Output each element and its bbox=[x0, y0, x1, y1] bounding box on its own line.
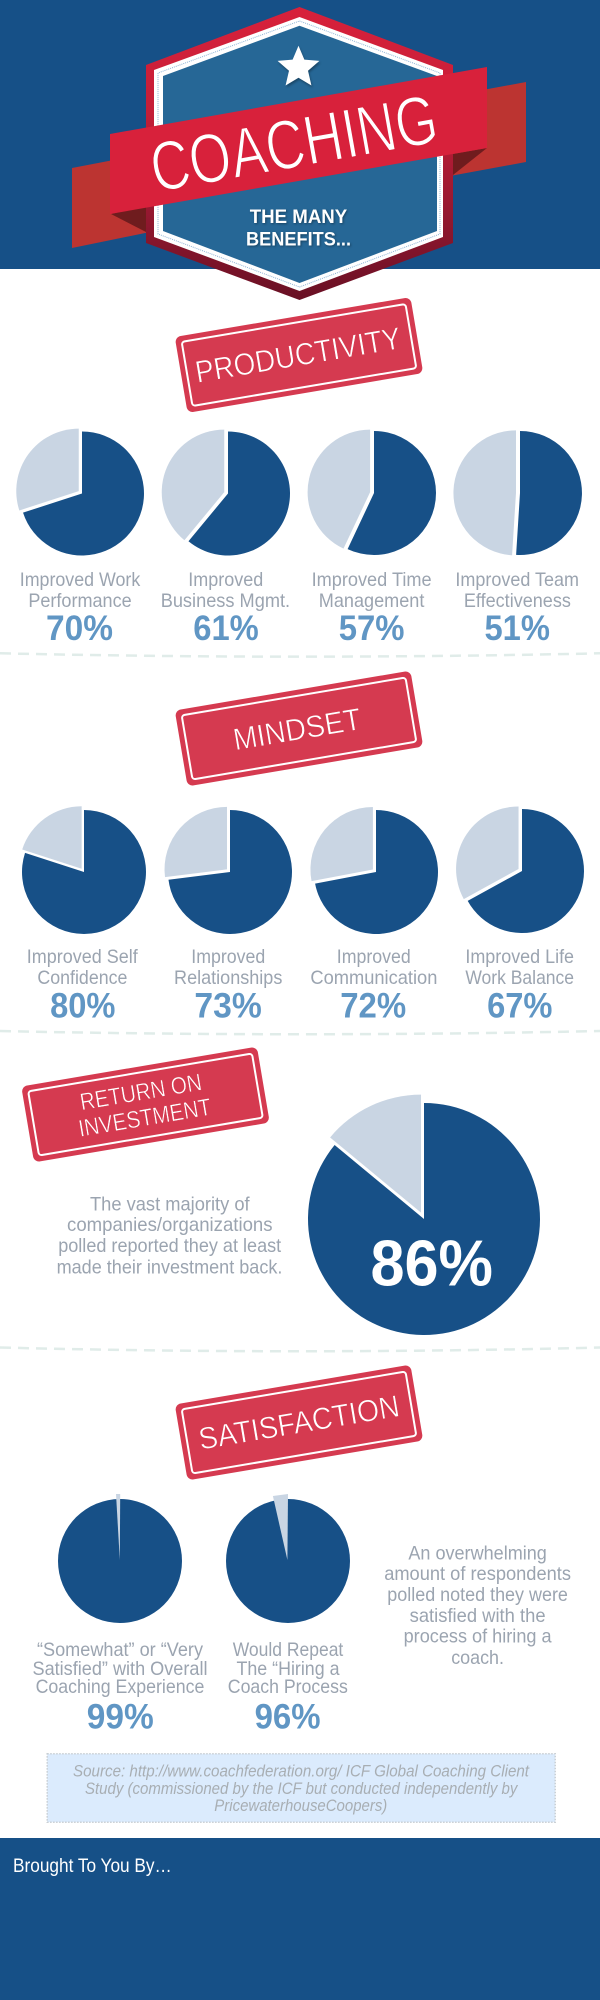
value: 73% bbox=[194, 986, 262, 1025]
text block: roi description: companies/organizations bbox=[67, 1214, 273, 1236]
text block: satisfaction description: satisfied with the bbox=[410, 1605, 546, 1627]
stat: improved work performance 70% bbox=[16, 429, 144, 648]
subtitle bbox=[246, 207, 351, 251]
text block: satisfaction description: coach. bbox=[451, 1647, 504, 1669]
label bbox=[228, 1639, 348, 1698]
label bbox=[455, 569, 579, 612]
heading stamp: productivity bbox=[175, 297, 423, 413]
value: 86% bbox=[370, 1227, 493, 1300]
text block: roi description: The vast majority of bbox=[90, 1194, 250, 1216]
value: 61% bbox=[193, 609, 259, 648]
ribbon back left bbox=[72, 153, 150, 248]
stat: satisfied with overall coaching experience 99% bbox=[32, 1494, 208, 1736]
ribbon back right bbox=[450, 82, 526, 176]
text block: satisfaction description: amount of respondents bbox=[384, 1563, 571, 1585]
heading stamp: return on investment: INVESTMENT bbox=[76, 1094, 213, 1143]
heading stamp: return on investment: RETURN ON bbox=[78, 1069, 204, 1116]
pie chart 73% bbox=[165, 807, 292, 934]
label: Communication bbox=[310, 967, 437, 989]
label: Coaching Experience bbox=[36, 1676, 204, 1698]
label: Improved Team bbox=[455, 569, 579, 591]
text block: satisfaction description: polled noted they were bbox=[387, 1584, 568, 1606]
stat: improved team effectiveness 51% bbox=[453, 430, 582, 648]
pie chart: roi 86% bbox=[308, 1095, 540, 1335]
ribbon fold left bbox=[111, 206, 146, 232]
header badge bbox=[72, 7, 526, 300]
label: Improved Time bbox=[312, 569, 432, 591]
stat: would repeat hiring a coach process 96% bbox=[226, 1494, 350, 1736]
label bbox=[310, 946, 437, 989]
value: 99% bbox=[87, 1697, 154, 1736]
pie chart 57% bbox=[308, 430, 436, 555]
label bbox=[20, 569, 140, 612]
pie chart 80% bbox=[22, 806, 146, 934]
source box: Study (commissioned by the ICF but conducted independently by bbox=[85, 1780, 519, 1798]
source box: Source: http://www.coachfederation.org/ ICF Global Coaching Client bbox=[73, 1763, 530, 1781]
pie chart 99% bbox=[58, 1494, 182, 1623]
pie chart 51% bbox=[453, 430, 582, 555]
pie chart 96% bbox=[226, 1494, 350, 1623]
icon: star bbox=[278, 46, 319, 86]
value: 57% bbox=[339, 609, 404, 648]
label: The “Hiring a bbox=[236, 1658, 340, 1680]
pie chart 61% bbox=[162, 430, 290, 556]
label: Improved bbox=[191, 946, 265, 968]
value: 96% bbox=[255, 1697, 321, 1736]
label: Business Mgmt. bbox=[161, 590, 290, 612]
label: Confidence bbox=[37, 967, 127, 989]
label: “Somewhat” or “Very bbox=[37, 1639, 203, 1661]
stat: improved relationships 73% bbox=[165, 807, 292, 1025]
heading stamp: return on investment bbox=[21, 1047, 270, 1162]
text block: satisfaction description: An overwhelming bbox=[408, 1542, 547, 1564]
hexagon white band bbox=[154, 17, 443, 291]
footer text: Brought To You By… bbox=[13, 1856, 172, 1877]
value: 51% bbox=[484, 609, 550, 648]
subtitle: BENEFITS... bbox=[246, 230, 351, 251]
stat: improved life work balance 67% bbox=[456, 806, 584, 1025]
label bbox=[161, 569, 290, 612]
label: Improved bbox=[337, 946, 411, 968]
ribbon fold right bbox=[453, 148, 487, 175]
title: COACHING bbox=[144, 80, 443, 207]
subtitle: THE MANY bbox=[250, 207, 348, 228]
footer bbox=[0, 1838, 600, 2000]
label bbox=[312, 569, 432, 612]
hexagon dotted stitch bbox=[158, 21, 440, 287]
value: 80% bbox=[50, 986, 116, 1025]
value: 70% bbox=[46, 609, 113, 648]
value: 72% bbox=[340, 986, 406, 1025]
heading stamp: productivity: PRODUCTIVITY bbox=[193, 321, 403, 390]
label bbox=[174, 946, 283, 989]
stat: improved self confidence 80% bbox=[22, 806, 146, 1025]
heading stamp: mindset: MINDSET bbox=[231, 701, 364, 757]
label bbox=[27, 946, 138, 989]
heading stamp: satisfaction bbox=[175, 1365, 423, 1480]
label: Satisfied” with Overall bbox=[32, 1658, 208, 1680]
value: 67% bbox=[487, 986, 552, 1025]
label bbox=[465, 946, 574, 989]
label bbox=[32, 1639, 208, 1698]
label: Work Balance bbox=[465, 967, 574, 989]
stat: improved time management 57% bbox=[308, 430, 436, 648]
label: Would Repeat bbox=[233, 1639, 344, 1661]
text block: roi description: made their investment back. bbox=[57, 1256, 282, 1278]
text block: roi description: polled reported they at least bbox=[58, 1235, 282, 1257]
stat: improved business mgmt 61% bbox=[161, 430, 290, 648]
source box: PricewaterhouseCoopers) bbox=[214, 1797, 387, 1815]
pie chart 67% bbox=[456, 806, 584, 933]
source box bbox=[47, 1754, 555, 1822]
label: Improved Self bbox=[27, 946, 138, 968]
pie chart 72% bbox=[310, 807, 438, 934]
heading stamp: satisfaction: SATISFACTION bbox=[196, 1388, 402, 1457]
main ribbon bbox=[110, 67, 487, 214]
hexagon outer bbox=[146, 7, 453, 300]
label: Management bbox=[319, 590, 425, 612]
stat: improved communication 72% bbox=[310, 807, 438, 1025]
label: Effectiveness bbox=[464, 590, 571, 612]
text block: roi description bbox=[57, 1194, 282, 1278]
label: Coach Process bbox=[228, 1676, 348, 1698]
header background bbox=[0, 0, 600, 269]
label: Improved Life bbox=[465, 946, 574, 968]
text block: satisfaction description bbox=[384, 1542, 571, 1669]
text block: satisfaction description: process of hiring a bbox=[404, 1626, 552, 1648]
pie chart 70% bbox=[16, 429, 144, 555]
label: Relationships bbox=[174, 967, 283, 989]
heading stamp: mindset bbox=[175, 671, 423, 786]
hexagon blue centre bbox=[163, 26, 437, 283]
label: Improved Work bbox=[20, 569, 140, 591]
label: Performance bbox=[28, 590, 132, 612]
label: Improved bbox=[188, 569, 263, 591]
